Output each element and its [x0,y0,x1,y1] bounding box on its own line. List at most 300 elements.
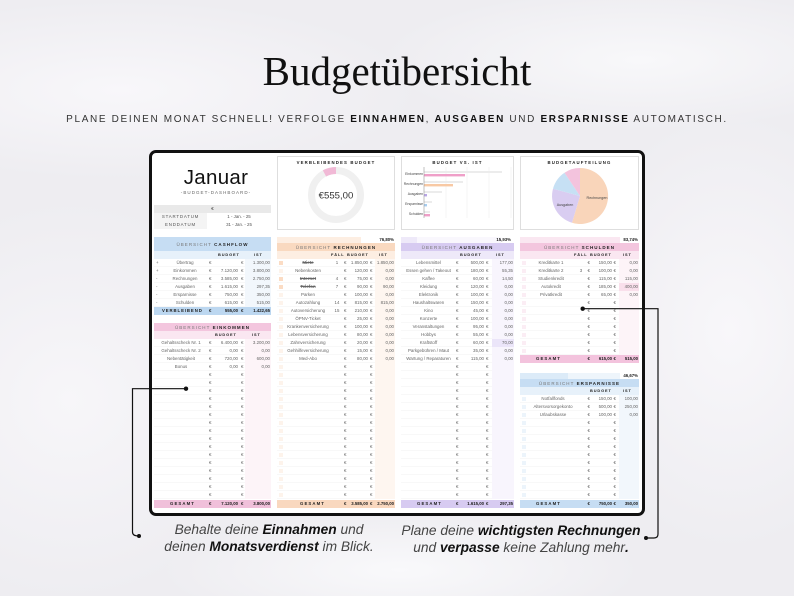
debts total: 515,00 [625,356,638,361]
bills rows: € [344,380,346,385]
bills rows: 0,00 [385,324,394,329]
expenses rows: € [456,260,458,265]
income rows: € [209,356,211,361]
expenses rows: € [456,420,458,425]
debts total: GESAMT [536,356,561,361]
bills rows: Krankenversicherung [287,324,329,329]
debts rows [538,260,639,353]
bills rows: € [344,468,346,473]
bills total: 3.585,00 [351,501,368,506]
cashflow rows: 515,00 [257,300,270,305]
cashflow rows: - [156,300,157,305]
savings progress [520,373,638,379]
bills rows: 0,00 [385,340,394,345]
expenses rows: € [456,460,458,465]
bills rows: € [370,268,372,273]
panel: date table [154,205,271,229]
expenses rows: € [456,300,458,305]
bills total: GESAMT [300,501,325,506]
expenses rows: 55,35 [502,268,513,273]
income rows: € [209,364,211,369]
expenses rows: € [486,396,488,401]
expenses rows: € [456,292,458,297]
bills rows: 0,00 [385,356,394,361]
debts column heads: FÄLL [574,252,588,257]
income total [154,500,271,508]
expenses rows: € [456,324,458,329]
bills rows: € [370,324,372,329]
bills rows: 100,00 [355,292,368,297]
cashflow rows: 750,00 [225,292,238,297]
debts header: ÜBERSICHT SCHULDEN [544,244,615,250]
bills total: € [344,501,346,506]
callout: bills: Plane deine wichtigsten Rechnungen [401,523,641,538]
bills column heads: IST [379,252,388,257]
expenses rows: € [456,348,458,353]
expenses rows: € [486,484,488,489]
expenses rows: 0,00 [504,316,513,321]
bills rows: € [370,364,372,369]
debts rows: Privatkredit [540,292,562,297]
cashflow rows: Schulden [176,300,194,305]
debts rows: Studienkredit [538,276,564,281]
bills rows: € [344,412,346,417]
expenses rows: € [456,468,458,473]
bills rows: € [344,276,346,281]
expenses rows: € [456,276,458,281]
expenses rows: € [456,364,458,369]
debts rows: € [614,260,616,265]
bills rows: € [370,492,372,497]
bar chart: Schulden [409,212,423,216]
expenses rows: 14,50 [502,276,513,281]
cashflow rows: 1.300,00 [253,260,270,265]
bills rows: € [344,364,346,369]
debts rows: € [614,268,616,273]
debts rows: € [588,268,590,273]
bar chart: Ersparnisse [405,202,423,206]
expenses total: 1.615,00 [467,501,484,506]
bills rows: € [370,340,372,345]
income rows: € [241,412,243,417]
callout: bills [401,523,641,555]
debts column heads: IST [623,252,632,257]
panel: month heading [180,166,251,195]
cashflow rows: - [156,284,157,289]
expenses rows: 180,00 [471,268,484,273]
expenses rows: 177,00 [500,260,513,265]
bills rows: € [370,476,372,481]
cashflow rows: € [209,276,211,281]
bills rows: € [344,340,346,345]
expenses rows [406,260,514,497]
bills rows: € [344,452,346,457]
income rows: € [209,388,211,393]
cashflow rows: Ersparnisse [173,292,197,297]
expenses rows: 0,00 [504,332,513,337]
income column heads: IST [252,332,261,337]
savings rows: € [588,452,590,457]
expenses rows: € [456,452,458,457]
expenses rows: Haushaltswaren [413,300,444,305]
donut chart: €555,00 [319,190,353,202]
bills rows: € [344,348,346,353]
bills rows: 0,00 [385,276,394,281]
debts rows: € [588,348,590,353]
bills rows: € [344,476,346,481]
bills rows: 1.850,00 [377,260,394,265]
income rows: € [241,404,243,409]
income rows: 6.400,00 [221,340,238,345]
income rows: € [241,460,243,465]
debts column heads [520,251,639,259]
bills rows: € [344,324,346,329]
panel: date table: ENDDATUM [165,222,196,227]
cashflow rows: € [209,292,211,297]
bills rows: 0,00 [385,348,394,353]
bills rows: 210,00 [355,308,368,313]
cashflow rows: - [156,292,157,297]
expenses rows: € [456,492,458,497]
savings column heads [520,387,639,395]
bills rows: € [370,284,372,289]
bills rows: € [344,260,346,265]
savings rows: € [588,492,590,497]
bills rows: € [370,388,372,393]
callout: income: Behalte deine Einnahmen und [175,522,363,537]
income rows: € [209,452,211,457]
month name: Januar [184,166,248,189]
income rows: € [241,428,243,433]
savings rows: € [614,396,616,401]
cashflow rows: € [209,300,211,305]
savings rows: € [614,428,616,433]
savings rows: € [588,396,590,401]
expenses rows: € [486,492,488,497]
bills rows [279,260,394,497]
income rows: Bonus [175,364,187,369]
debts total: 615,00 [599,356,612,361]
bills rows: 0,00 [385,332,394,337]
bills progress: 76,80% [379,237,394,242]
bills rows: Parken [301,292,315,297]
debts rows: € [614,276,616,281]
bills rows: € [370,404,372,409]
income rows: € [241,484,243,489]
debts rows: 150,00 [599,260,612,265]
income rows: Nebentätigkeit [167,356,195,361]
income total: € [241,501,243,506]
income rows: € [209,380,211,385]
income rows: € [241,476,243,481]
cashflow rows: € [241,292,243,297]
pie chart: Rechnungen [587,196,607,200]
bills rows: € [344,396,346,401]
debts total: € [588,356,590,361]
bills rows: 7 [336,284,338,289]
bills rows: Zahnversicherung [290,340,326,345]
expenses rows: € [456,340,458,345]
debts progress [520,237,638,243]
income rows: € [241,396,243,401]
bills rows: € [344,356,346,361]
income rows: € [209,396,211,401]
savings rows: € [614,452,616,457]
expenses rows: € [486,316,488,321]
savings column heads: IST [623,388,632,393]
income rows: 0,00 [261,348,270,353]
cashflow rows: € [241,300,243,305]
debts rows: € [614,340,616,345]
debts rows: € [614,300,616,305]
expenses rows: € [486,332,488,337]
savings rows: € [588,436,590,441]
debts rows: € [614,292,616,297]
expenses rows: Elektronik [419,292,438,297]
expenses rows: € [486,300,488,305]
debts rows: € [614,332,616,337]
debts rows: € [614,308,616,313]
savings column heads: BUDGET [590,388,612,393]
bills rows: Gehhilfeversicherung [287,348,329,353]
savings rows: 100,00 [625,396,638,401]
bills rows: 25,00 [357,316,368,321]
savings rows: € [588,404,590,409]
bills rows: 80,00 [357,356,368,361]
debts rows: € [588,300,590,305]
expenses rows: 100,00 [471,316,484,321]
bills rows: € [344,492,346,497]
expenses rows: € [486,364,488,369]
expenses rows: € [486,476,488,481]
debts total [520,355,639,363]
savings rows: € [588,428,590,433]
bills rows: € [370,332,372,337]
savings rows: € [614,460,616,465]
income rows: € [241,492,243,497]
bills rows: € [370,396,372,401]
bills rows: € [370,428,372,433]
expenses rows: € [486,380,488,385]
bills rows: € [344,292,346,297]
savings rows: € [614,476,616,481]
income rows: € [241,348,243,353]
expenses rows: 0,00 [504,300,513,305]
expenses rows: 0,00 [504,324,513,329]
debts progress: 83,74% [623,237,638,242]
income rows: € [241,372,243,377]
income total: 3.800,00 [253,501,270,506]
expenses rows: € [456,444,458,449]
expenses rows: € [456,308,458,313]
savings rows: € [588,460,590,465]
bills rows: Miete [302,260,314,265]
expenses rows: € [486,388,488,393]
bills rows: € [370,308,372,313]
expenses rows: € [486,308,488,313]
savings rows: Urlaubskasse [540,412,566,417]
debts rows: € [588,332,590,337]
expenses rows: Parkgebühren / Maut [408,348,449,353]
expenses rows: 0,00 [504,284,513,289]
dashboard frame [149,150,645,516]
income rows: Gehaltsscheck Nr. 2 [161,348,201,353]
income rows: € [241,364,243,369]
bills rows: € [370,412,372,417]
expenses rows: 70,00 [502,340,513,345]
cashflow rows: 615,00 [225,300,238,305]
bills rows: 4 [336,276,338,281]
expenses rows: € [486,260,488,265]
debts rows: 0,00 [629,268,638,273]
income rows: € [241,444,243,449]
bills rows: 815,00 [355,300,368,305]
expenses total: 297,35 [500,501,513,506]
expenses rows: € [456,284,458,289]
savings rows: € [614,492,616,497]
expenses rows: 0,00 [504,348,513,353]
cashflow rows: - [156,276,157,281]
expenses total [401,500,514,508]
income total: € [209,501,211,506]
cashflow rows: + [156,268,159,273]
debts header [520,243,639,251]
expenses rows: Kleidung [420,284,437,289]
income rows: € [209,420,211,425]
bills progress [277,237,394,243]
savings rows [533,396,638,497]
cashflow rows: € [209,260,211,265]
bills rows: € [344,444,346,449]
debts rows: € [588,324,590,329]
income total: 7.120,00 [221,501,238,506]
bills rows: 14 [335,300,339,305]
expenses rows: Lebensmittel [416,260,441,265]
bills column heads [277,251,395,259]
expenses rows: € [486,324,488,329]
subtitle: PLANE DEINEN MONAT SCHNELL! VERFOLGE EINNAHMEN, AUSGABEN UND ERSPARNISSE AUTOMATISCH. [66,114,728,125]
debts rows: € [614,324,616,329]
bills rows: 0,00 [385,292,394,297]
expenses rows: 0,00 [504,308,513,313]
bills rows: 15 [335,308,339,313]
expenses rows: € [456,388,458,393]
bills rows: Nebenkosten [295,268,321,273]
expenses rows: € [486,404,488,409]
debts rows: 0,00 [629,292,638,297]
expenses rows: € [486,436,488,441]
bills column heads: BUDGET [347,252,369,257]
bills rows: € [370,420,372,425]
income rows: € [241,340,243,345]
income header: ÜBERSICHT EINKOMMEN [175,324,250,330]
expenses rows: 100,00 [471,292,484,297]
panel: cashflow [154,237,271,315]
cashflow rows: 3.585,00 [221,276,238,281]
debts rows: 65,00 [601,292,612,297]
pie chart [552,168,608,224]
savings rows: € [588,420,590,425]
savings total [520,500,639,508]
cashflow header [154,237,271,251]
bills rows: € [370,484,372,489]
debts rows: € [588,340,590,345]
income rows: Gehaltsscheck Nr. 1 [161,340,201,345]
income rows: € [209,348,211,353]
expenses progress [401,237,511,243]
bills rows: 75,00 [357,276,368,281]
card: budget vs actual bar chart [401,156,514,230]
expenses rows: € [486,372,488,377]
bills rows: € [344,372,346,377]
bar chart: Einkommen [405,172,423,176]
cashflow column heads: IST [254,252,263,257]
savings rows: Altersvorsorgekonto [533,404,573,409]
income rows: € [209,372,211,377]
card: budget allocation pie [520,156,639,230]
bills rows: 0,00 [385,316,394,321]
bills rows: 815,00 [381,300,394,305]
donut chart [308,167,364,223]
bills rows: € [370,452,372,457]
expenses rows: 60,00 [473,340,484,345]
bills rows: € [370,356,372,361]
bills rows: Autozahlung [296,300,320,305]
expenses rows: Essen gehen / Takeout [406,268,451,273]
cashflow column heads: BUDGET [218,252,240,257]
pie chart: Ausgaben [557,203,573,207]
income rows: € [241,468,243,473]
expenses rows: € [456,428,458,433]
expenses rows: € [486,284,488,289]
income rows: € [209,476,211,481]
debts rows: € [588,284,590,289]
debts rows: 185,00 [599,284,612,289]
expenses rows: € [456,380,458,385]
expenses rows: € [456,412,458,417]
expenses header: ÜBERSICHT AUSGABEN [422,244,493,250]
bills rows: € [344,300,346,305]
debts rows: € [588,276,590,281]
bills total [277,500,395,508]
cashflow remaining total: € [241,308,243,313]
panel: date table: STARTDATUM [162,214,199,219]
arrow: income callout line [132,386,188,538]
income rows: € [241,420,243,425]
savings rows: € [614,444,616,449]
cashflow rows: € [209,284,211,289]
cashflow rows: 3.800,00 [253,268,270,273]
debts rows: 400,00 [625,284,638,289]
savings rows: € [588,484,590,489]
expenses rows: Hobbys [421,332,436,337]
cashflow remaining total: 555,00 [225,308,238,313]
bills rows: € [370,292,372,297]
income total: GESAMT [170,501,195,506]
bills rows: 0,00 [385,268,394,273]
savings rows: € [588,412,590,417]
bar chart: Ausgaben [408,192,423,196]
bills rows: € [344,436,346,441]
cashflow remaining total [154,307,271,315]
debts rows: € [588,292,590,297]
debts rows: 115,00 [625,276,638,281]
savings total: 750,00 [599,501,612,506]
card title: BUDGETAUFTEILUNG [548,160,611,164]
cashflow rows: 7.120,00 [221,268,238,273]
panel: debts [520,237,639,363]
expenses rows: € [456,372,458,377]
